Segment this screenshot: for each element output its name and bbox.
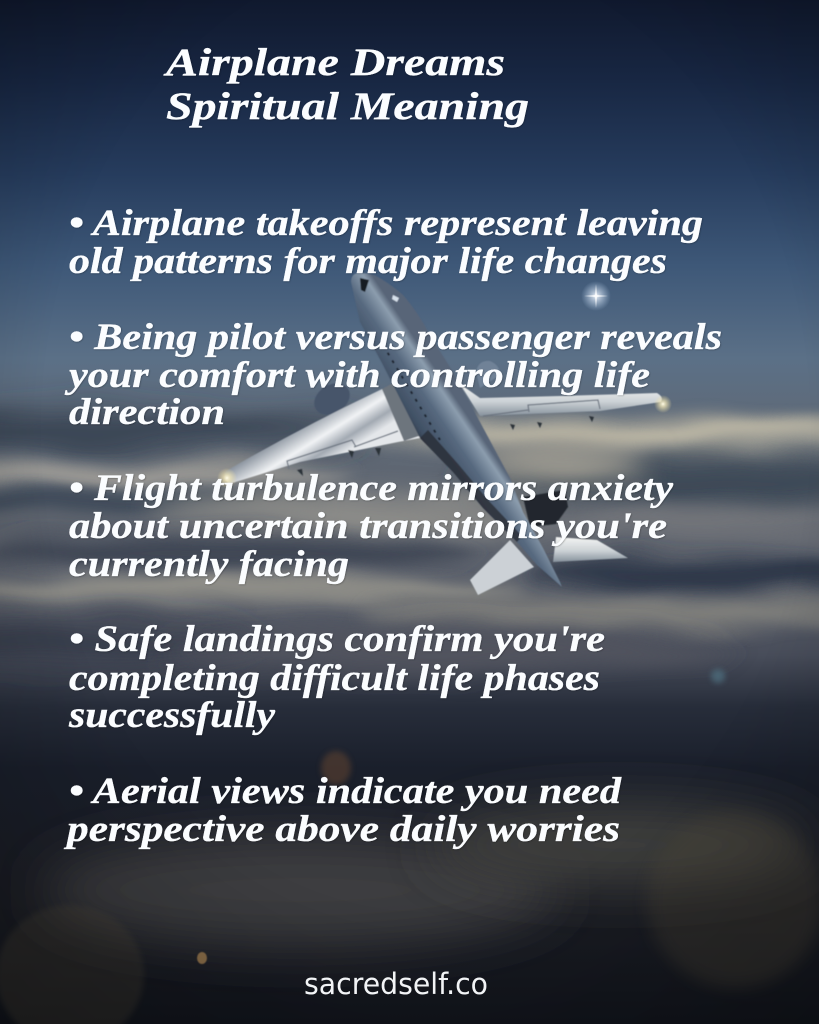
- bullet: turbulence: about uncertain transitions you're: [69, 506, 667, 547]
- bullet: takeoffs: • Airplane takeoffs represent leaving: [69, 203, 703, 244]
- far engine: [476, 361, 500, 388]
- window row: [383, 345, 440, 440]
- bullet: aerial views: • Aerial views indicate you need: [69, 771, 622, 812]
- cockpit window: [360, 278, 369, 292]
- left stabilizer: [470, 540, 534, 595]
- tail fin: [523, 490, 568, 527]
- title: [162, 41, 529, 128]
- bullet: turbulence: [69, 468, 674, 585]
- bullet: pilot versus passenger: • Being pilot versus passenger reveals: [69, 317, 722, 358]
- fuselage belly shadow line: [420, 430, 522, 542]
- bokeh light spots: [0, 669, 819, 1024]
- bullet: pilot versus passenger: [64, 317, 722, 433]
- bullet: takeoffs: [69, 203, 703, 282]
- footer website: sacredself.co: [304, 967, 488, 1001]
- bullet: safe landings: completing difficult life phases: [69, 658, 600, 699]
- bullet: takeoffs: old patterns for major life changes: [69, 241, 667, 282]
- wingtip glow lights: [217, 395, 672, 488]
- bullet: aerial views: [63, 771, 622, 850]
- left wing root panel: [382, 382, 425, 441]
- bullet: turbulence: currently facing: [69, 544, 349, 585]
- bullet: safe landings: • Safe landings confirm you're: [69, 619, 605, 660]
- bullet: safe landings: [68, 619, 605, 736]
- right wing: [460, 384, 662, 416]
- title: Airplane Dreams: [162, 41, 505, 84]
- bullet: safe landings: successfully: [68, 695, 276, 736]
- right stabilizer: [553, 537, 628, 562]
- left wing: [225, 389, 420, 484]
- left engine: [308, 377, 356, 421]
- bullet: aerial views: perspective above daily worries: [63, 809, 620, 850]
- background: cloud layers: [0, 414, 819, 668]
- nose highlight: [392, 295, 399, 302]
- wing flap lines: [287, 400, 600, 469]
- fuselage: [351, 273, 562, 587]
- background: lower haze: [40, 805, 810, 945]
- bullet: pilot versus passenger: direction: [69, 392, 225, 433]
- airplane illustration: [225, 273, 662, 595]
- icon: bright star: [581, 281, 611, 311]
- title: Spiritual Meaning: [166, 85, 529, 128]
- bullet: turbulence: • Flight turbulence mirrors anxiety: [69, 468, 674, 509]
- flap track fairings: [297, 416, 594, 476]
- bullet: pilot versus passenger: your comfort with controlling life: [64, 355, 650, 396]
